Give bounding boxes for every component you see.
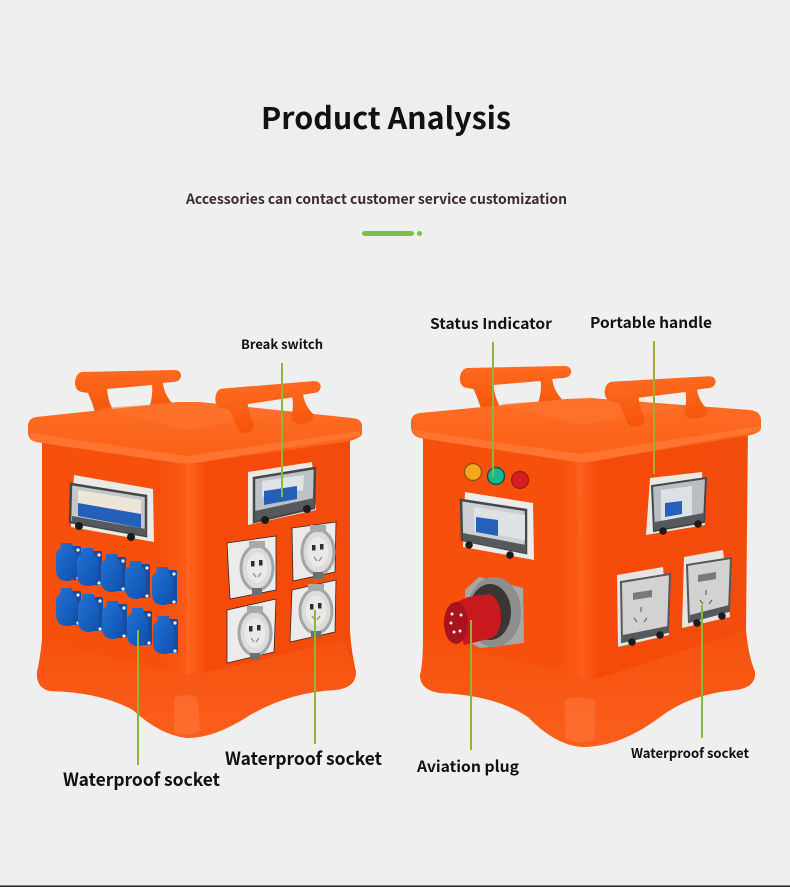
handle: left box rear [75, 370, 181, 418]
covered sockets: two outlets [617, 550, 731, 647]
leader line: aviation plug [470, 620, 472, 750]
title [256, 85, 527, 150]
title: Product Analysis [261, 94, 511, 138]
label: aviation plug: Aviation plug [416, 755, 519, 777]
leader line: status indicator [492, 342, 494, 477]
breaker panel: front switch [461, 492, 534, 560]
product: right distribution box [411, 366, 761, 747]
leader line: break switch [281, 363, 283, 497]
leader line: middle waterproof socket [314, 610, 316, 744]
product: left distribution box [28, 370, 362, 738]
leader line: portable handle [653, 341, 655, 474]
title accent [362, 231, 422, 236]
handle: right box rear [460, 366, 571, 414]
grey sockets: four covered outlets [227, 522, 336, 663]
lid: left box [28, 402, 362, 464]
aviation plug [444, 577, 524, 648]
label: middle waterproof socket: Waterproof socket [225, 745, 382, 771]
breaker panel: four-pole switch [248, 462, 316, 525]
box body: left box [37, 428, 356, 738]
handle: right box front [604, 376, 717, 428]
handle: left box front [215, 381, 323, 435]
label: break switch: Break switch [241, 334, 323, 353]
label: status indicator: Status Indicator [430, 313, 552, 334]
breaker panel: ten-way switch [70, 475, 154, 542]
label: left waterproof socket: Waterproof socket [63, 766, 220, 792]
label: portable handle: Portable handle [590, 312, 712, 333]
status indicators: amber green red [464, 464, 528, 488]
blue sockets: two rows of ten [56, 543, 178, 654]
box body: right box [420, 426, 755, 747]
breaker panel: side switch [646, 472, 706, 535]
subtitle: Accessories can contact customer service customization [185, 189, 567, 209]
lid: right box [411, 398, 761, 462]
leader line: left waterproof socket [137, 630, 139, 765]
label: right waterproof socket: Waterproof socket [631, 742, 749, 762]
bottom edge line [0, 886, 790, 887]
leader line: right waterproof socket [701, 605, 703, 738]
